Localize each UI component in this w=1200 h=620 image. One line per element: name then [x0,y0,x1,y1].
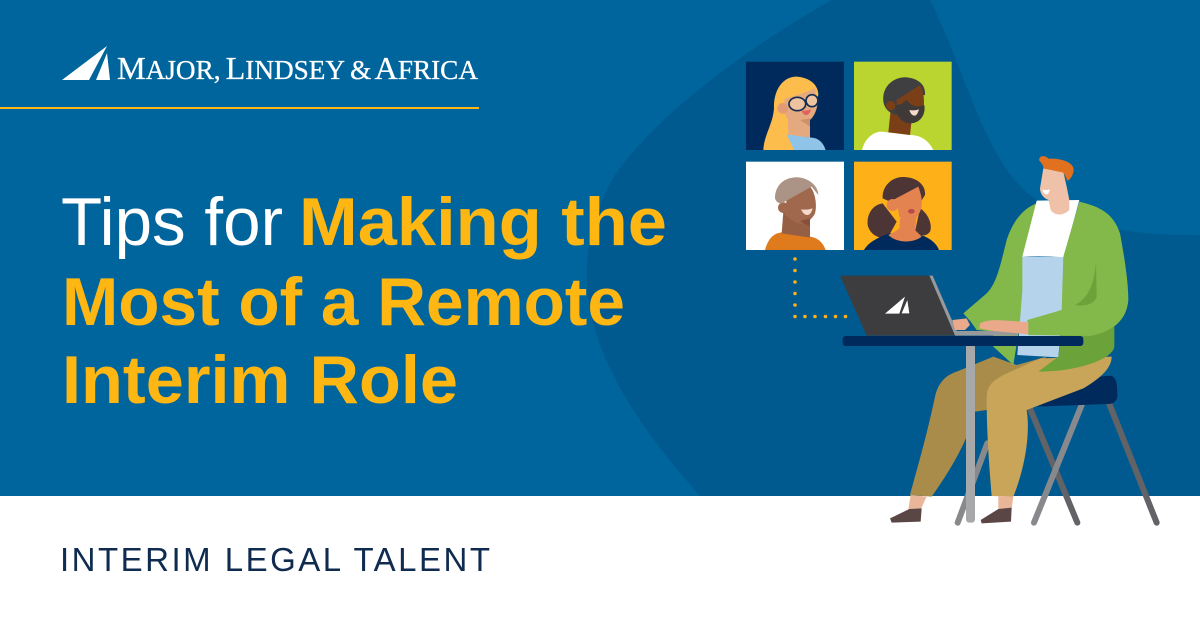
undershirt [1017,257,1064,357]
table leg [966,343,975,523]
person: upper body and laptop [840,156,1128,372]
title: Making the [299,184,667,260]
blue banner background [0,0,1200,496]
near leg [987,357,1112,497]
logo: MAJOR, LINDSEY & AFRICA [117,50,478,86]
tile: woman with dark hair [854,162,952,250]
person: chair and legs [890,343,1157,523]
dotted connector [793,257,847,318]
divider [0,107,479,109]
white shirt [1022,200,1079,257]
far leg [910,357,1047,497]
tile: man with beard [854,62,952,150]
title: Interim Role [62,342,458,418]
cardigan far side [963,203,1037,365]
cardigan near side [1027,202,1128,336]
icon: chair [958,376,1157,523]
title: Most of a Remote [62,264,625,340]
tile: person with grey hair [746,162,844,250]
laptop [840,276,1017,336]
cardigan shadow fold [1075,260,1097,305]
ankles and shoes [890,495,1013,523]
footer label: INTERIM LEGAL TALENT [60,541,490,578]
title [61,184,667,418]
cardigan lower panel [1038,327,1114,372]
hands [952,318,1028,334]
tile: woman with glasses [746,62,844,150]
video call tiles [746,62,952,250]
table top [843,336,1083,346]
head [1039,156,1074,214]
title: Tips for [61,184,283,260]
